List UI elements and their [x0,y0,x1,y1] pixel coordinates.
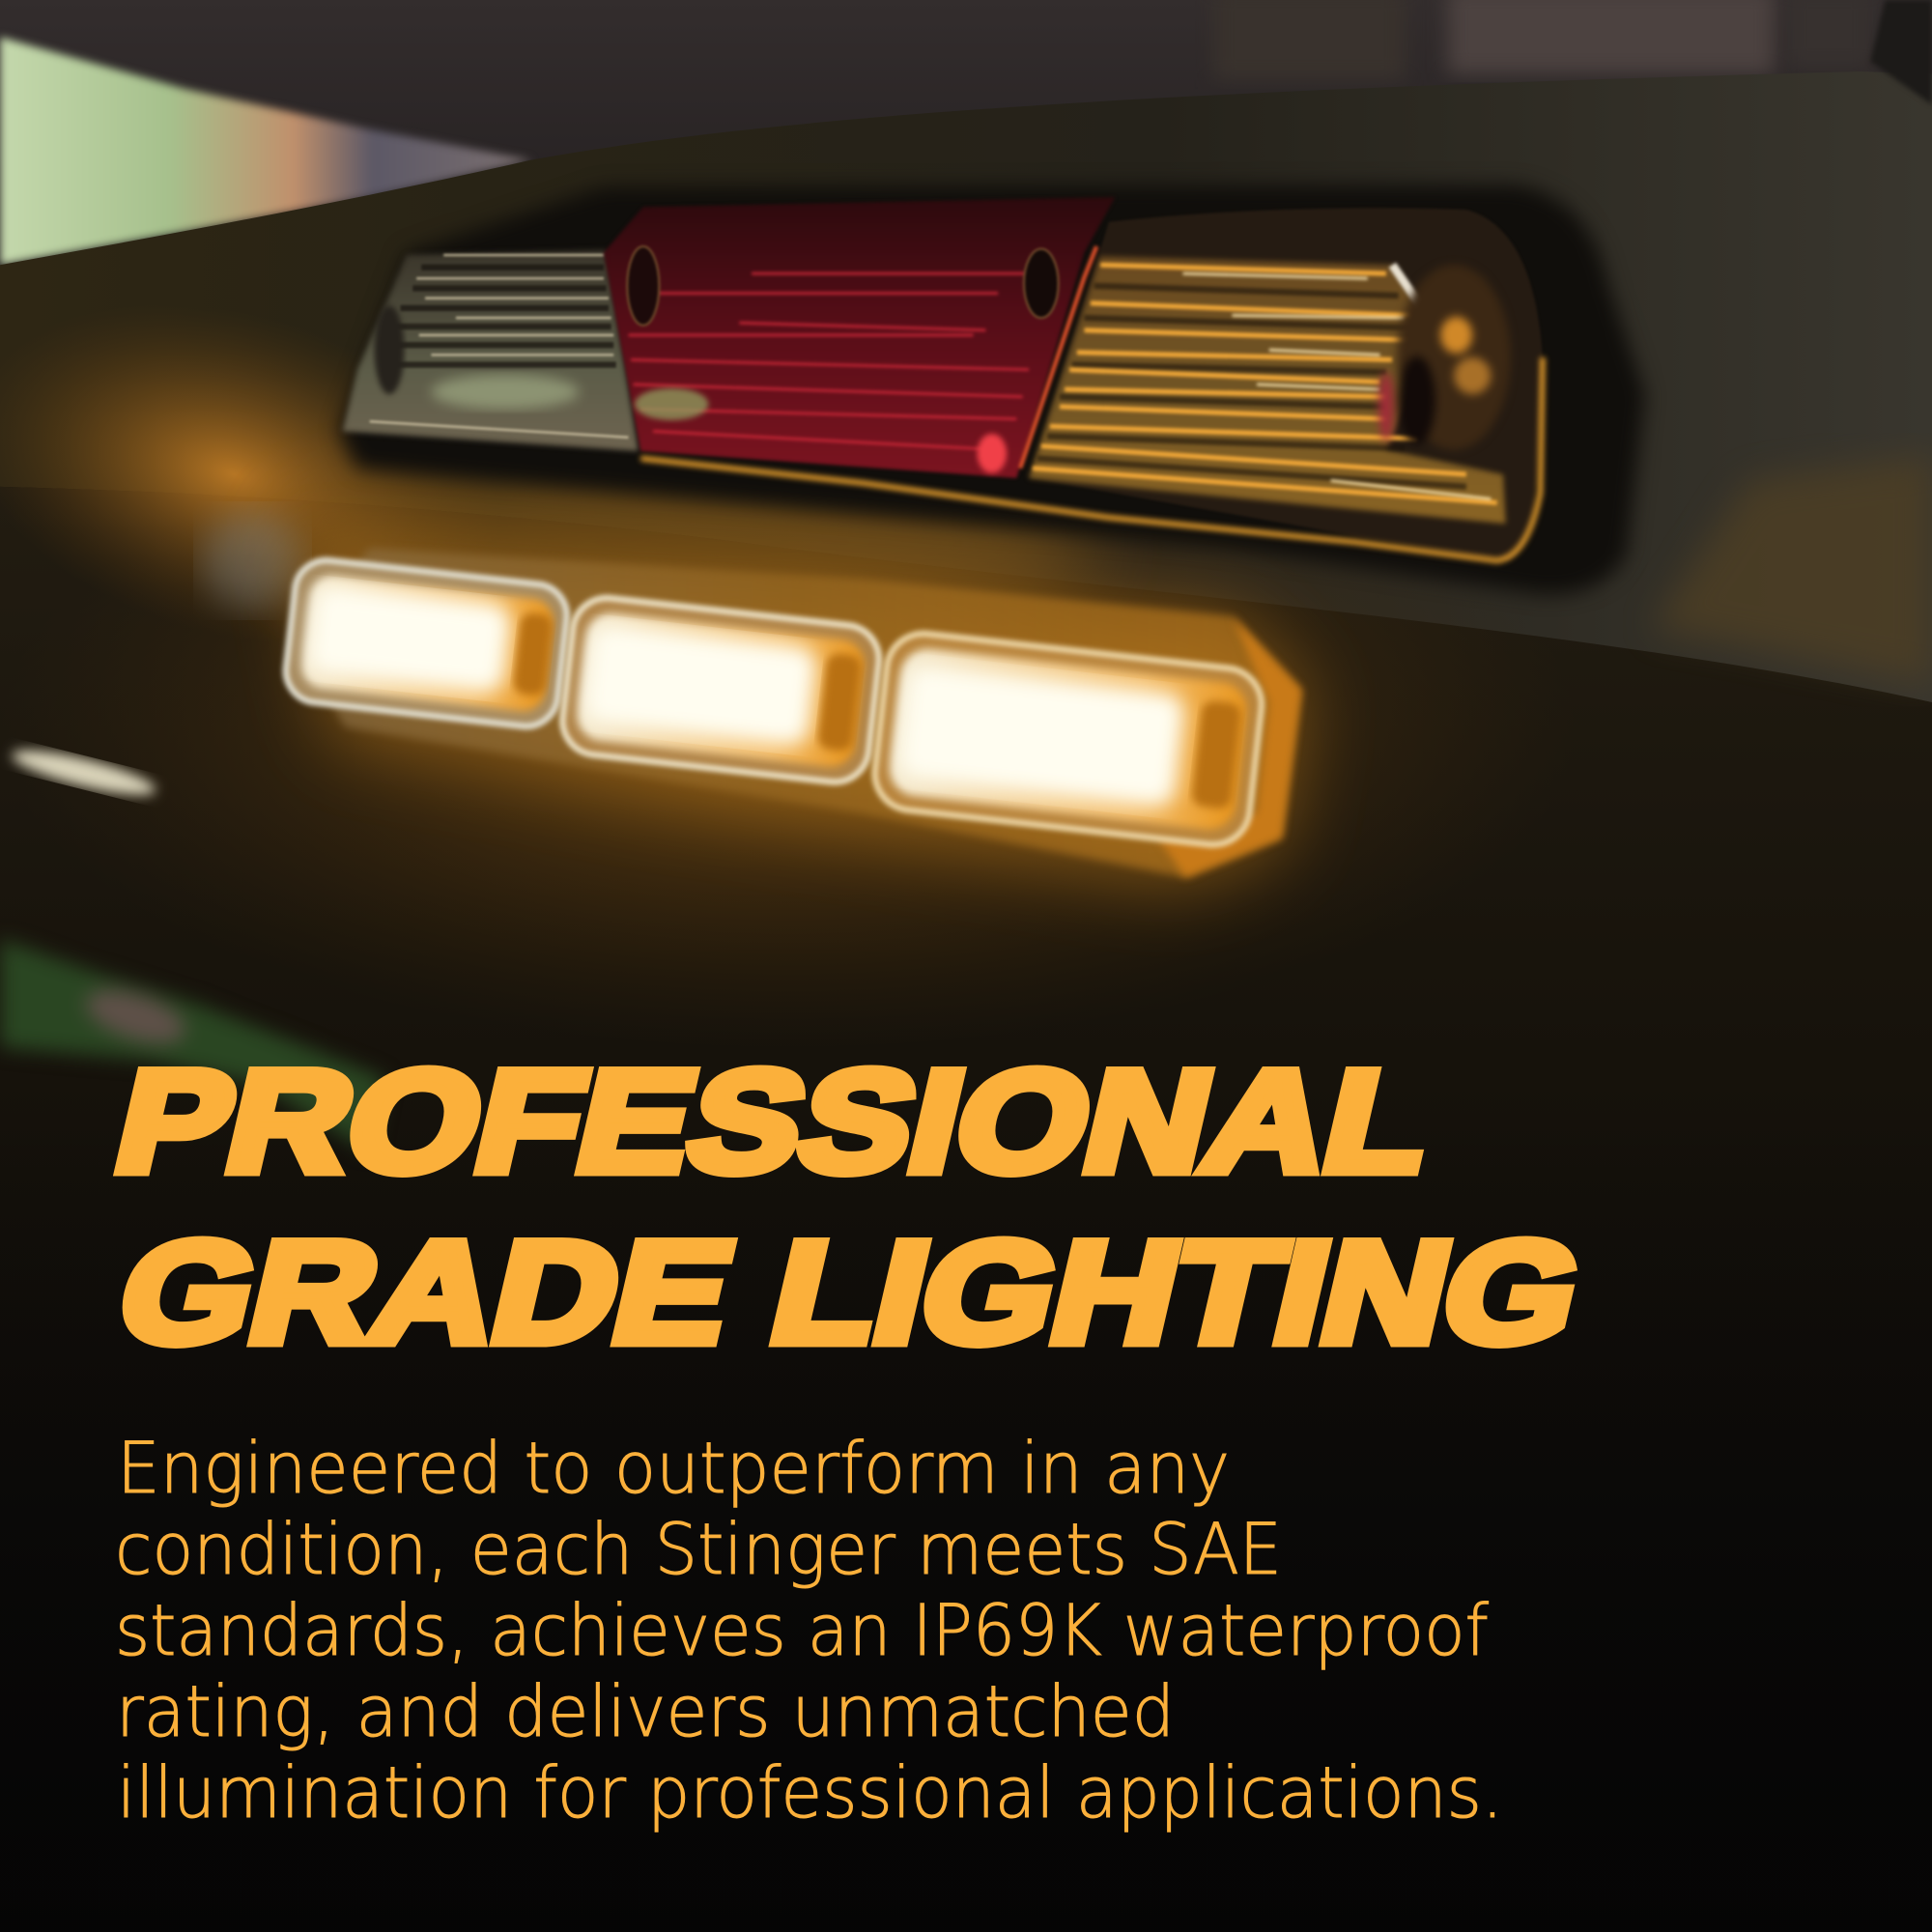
mounting plate [296,549,1301,877]
lens bottom amber edge [640,357,1543,560]
foliage reflection lower left [0,939,384,1152]
brake lamp housing [339,185,1645,594]
background: garage wall [0,0,1932,308]
mirror corner [1870,0,1932,104]
bottom dark fade [0,1109,1932,1932]
center red lens [604,197,1115,478]
body line 5: illumination for professional applications. [117,1752,1503,1834]
window opening with foliage [0,37,532,265]
lens 2 [559,594,883,785]
amber glow around LEDs [0,249,1577,1047]
LED light bar [282,549,1306,887]
brake lamp [343,197,1543,560]
body line 1: Engineered to outperform in any [117,1428,1230,1510]
right amber lens [640,208,1543,560]
body paragraph [115,1428,1503,1834]
vehicle lower panel [0,487,1932,1932]
title line 1: PROFESSIONAL [102,1040,1448,1202]
lens 3 [871,630,1265,849]
LED bloom [296,554,1306,887]
body line 4: rating, and delivers unmatched [116,1671,1175,1753]
white reflection streak [9,742,158,804]
body line 3: standards, achieves an IP69K waterproof [115,1590,1489,1672]
body line 2: condition, each Stinger meets SAE [115,1509,1282,1591]
lens 1 [282,556,570,729]
warm reflection right [1651,456,1932,684]
vehicle upper panel [0,71,1932,715]
title [102,1040,1596,1373]
left clear lens [343,250,639,451]
title line 2: GRADE LIGHTING [105,1211,1596,1373]
right lens bulb [1378,265,1511,450]
